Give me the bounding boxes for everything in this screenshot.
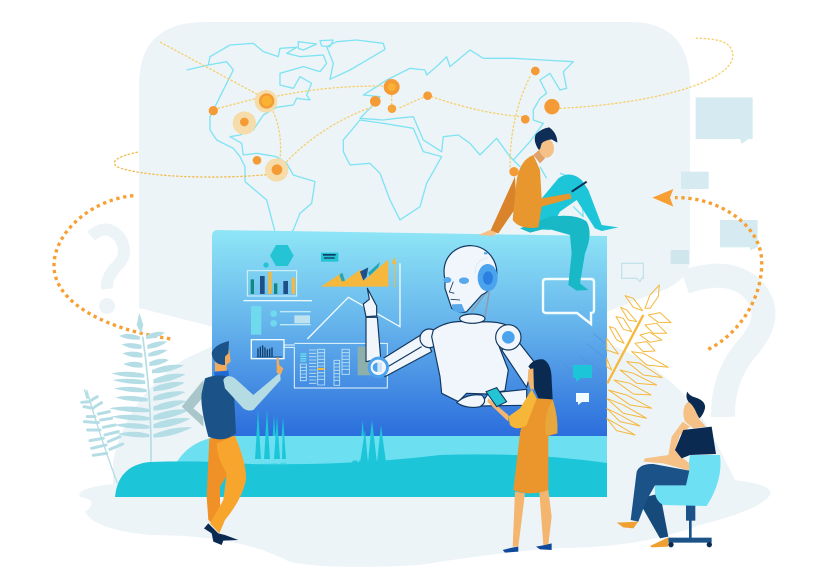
arm: [643, 422, 690, 471]
hand: [277, 357, 283, 375]
robot right arm: [480, 342, 534, 406]
dotted arrow right: [652, 189, 762, 349]
robot left shoulder: [420, 329, 439, 348]
neck: [533, 148, 545, 163]
chair base: [668, 503, 712, 547]
robot elbow: [368, 357, 389, 378]
far sleeve: [545, 400, 557, 435]
greenland and arctic islands: [298, 40, 385, 79]
face: [223, 350, 231, 366]
chat icons right: [622, 97, 758, 282]
hand: [478, 230, 497, 236]
cyan block: [251, 306, 261, 335]
eurasia: [360, 50, 573, 167]
tablet: [486, 388, 507, 407]
hair: [528, 359, 553, 399]
faint fern behind screen: [563, 333, 605, 390]
teal ground: [115, 454, 607, 497]
robot: [363, 246, 534, 407]
speech bubble: [543, 279, 594, 324]
hair: [535, 127, 557, 149]
robot head: [443, 246, 498, 312]
background panel: [139, 22, 690, 330]
man on chair: [617, 392, 721, 547]
bar chart panel: [247, 271, 297, 296]
question mark right: [685, 276, 764, 417]
ground blob: [79, 340, 771, 567]
collar: [214, 371, 229, 378]
line chart: [307, 263, 400, 339]
front leg: [631, 464, 689, 522]
phone: [572, 182, 587, 192]
robot right shoulder: [496, 325, 521, 350]
back leg: [207, 436, 235, 530]
hexagon: [270, 245, 294, 266]
vest: [201, 375, 236, 439]
yellow fern: [607, 285, 671, 435]
head: [539, 139, 554, 158]
light cyan hill: [175, 436, 607, 480]
australia: [540, 167, 583, 217]
toggle controls: [270, 310, 311, 327]
head: [683, 401, 706, 428]
arm: [487, 398, 508, 422]
arm: [223, 373, 281, 411]
teal chat bubble: [573, 365, 592, 382]
robot torso: [432, 321, 508, 402]
shoes: [204, 523, 238, 545]
dot: [263, 262, 269, 268]
city markers: [209, 67, 560, 182]
flight routes: [114, 38, 733, 177]
teal spikes: [255, 410, 376, 470]
legs: [513, 490, 552, 547]
standing man: [182, 341, 283, 545]
robot left arm: [363, 288, 432, 377]
neck: [215, 360, 227, 372]
fern big left: [109, 313, 192, 462]
dress: [513, 389, 557, 493]
robot hand: [457, 395, 485, 407]
back leg: [640, 493, 668, 538]
question mark left: [91, 229, 124, 314]
back arm: [182, 380, 205, 427]
chair seat: [655, 455, 721, 506]
data table panel: [284, 343, 387, 388]
far leg: [523, 175, 618, 231]
back arm: [490, 177, 517, 233]
yellow triangles: [321, 258, 396, 287]
face: [528, 368, 534, 389]
fern small left: [82, 389, 123, 483]
person sitting on screen: [478, 127, 618, 291]
torso: [513, 155, 572, 228]
hair: [212, 341, 229, 365]
shoes: [503, 543, 552, 553]
small device: [321, 253, 338, 262]
shoes: [617, 522, 668, 547]
africa: [343, 120, 442, 220]
light band: [212, 436, 607, 465]
near leg: [520, 216, 590, 291]
dashboard widgets: [243, 245, 400, 388]
dotted arc left: [54, 196, 172, 339]
front leg: [210, 436, 246, 533]
white chat bubble: [576, 393, 589, 405]
torso: [675, 427, 716, 458]
screen panel: [212, 230, 607, 438]
robot neck: [460, 292, 489, 323]
americas: [187, 43, 327, 233]
sleeve: [508, 389, 537, 428]
small chart card: [251, 340, 284, 359]
world map: [187, 40, 583, 233]
woman with tablet: [486, 359, 557, 553]
spikes front: [255, 412, 386, 463]
hair: [686, 392, 705, 418]
